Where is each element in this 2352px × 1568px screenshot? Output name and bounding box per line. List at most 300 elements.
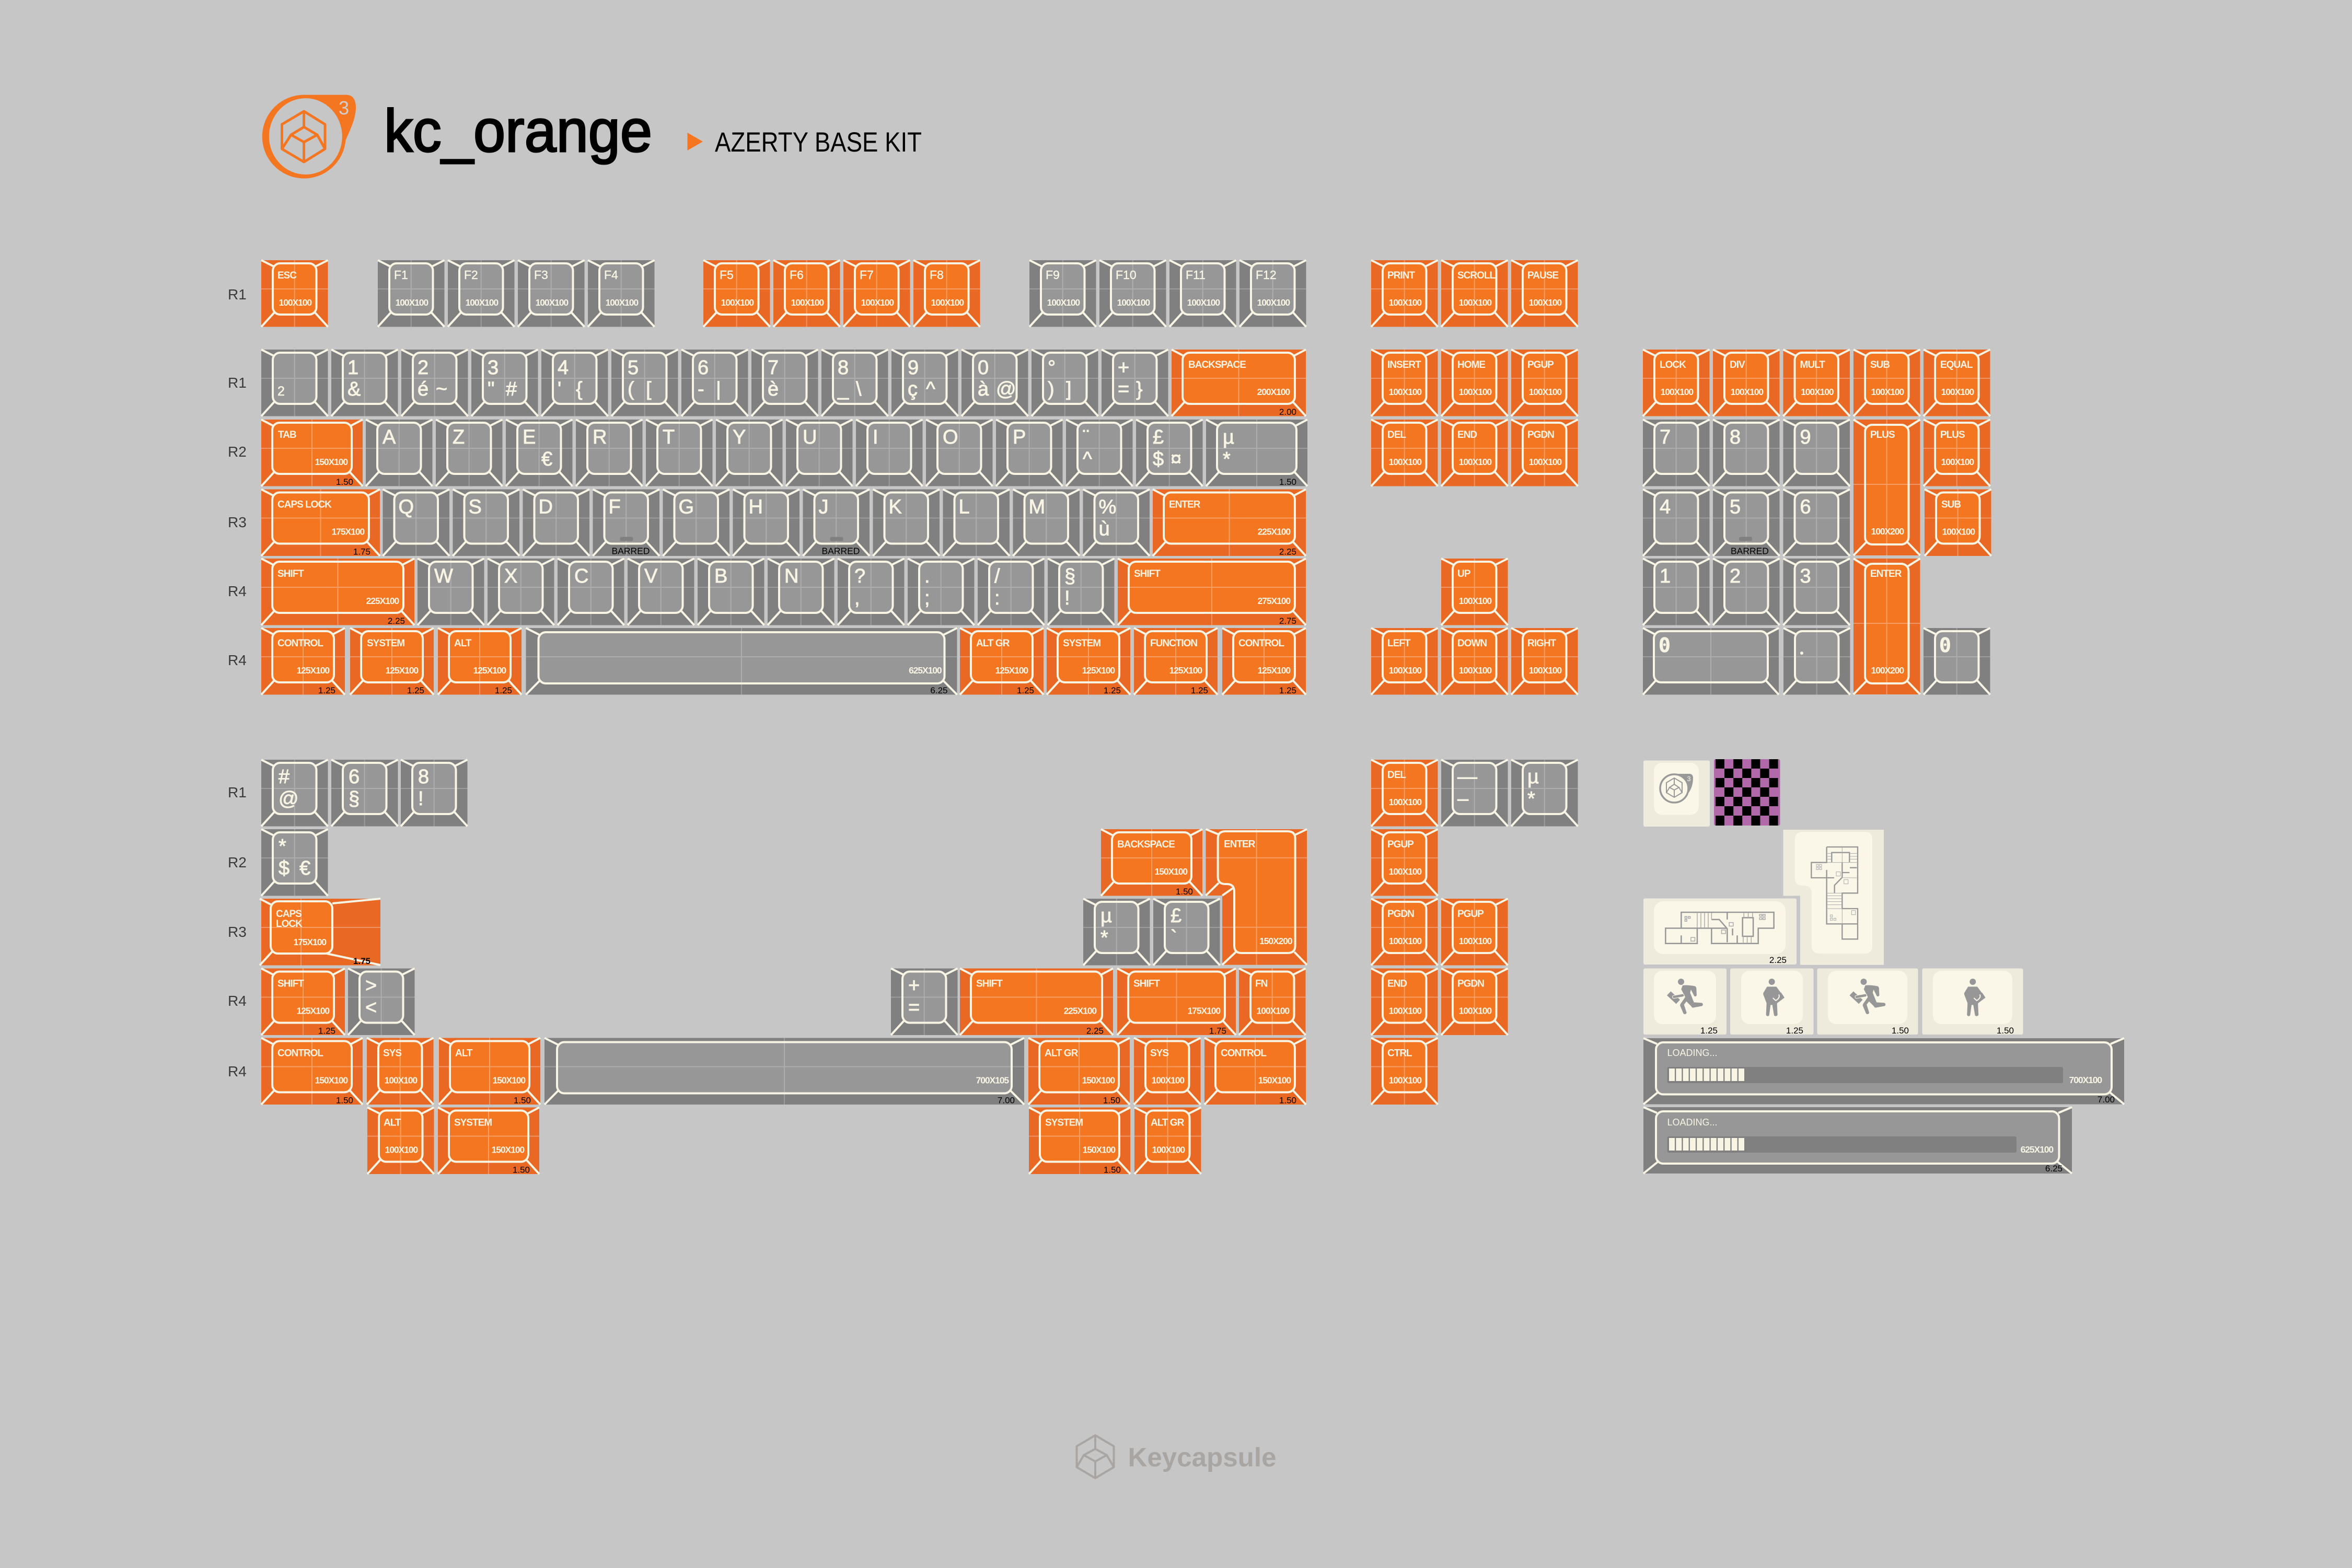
key: PGDN: PGDN bbox=[1527, 429, 1554, 440]
key: LEFT: 100X100 bbox=[1389, 665, 1422, 676]
key: N bbox=[768, 559, 834, 625]
key: 4: 4 bbox=[1660, 496, 1671, 518]
key: INSERT: 100X100 bbox=[1389, 387, 1422, 397]
key: LEFT bbox=[1371, 628, 1438, 695]
key: PGDN alt 2: PGDN bbox=[1457, 978, 1484, 990]
key: SYSTEM 1.50 bbox=[438, 1108, 539, 1175]
key: F11 bbox=[1169, 260, 1236, 327]
key: pound: ¤ bbox=[1171, 448, 1181, 470]
novelty key: running figure 1.50 bbox=[1817, 969, 1918, 1036]
key: R bbox=[576, 420, 643, 486]
key: L: L bbox=[958, 496, 970, 518]
key: M: M bbox=[1028, 496, 1045, 518]
key: space 6.25: 6.25 bbox=[930, 686, 948, 695]
key: right CONTROL: 125X100 bbox=[1258, 665, 1291, 676]
novelty key: vertical floor map bbox=[1783, 830, 1884, 965]
key: CONTROL 1.50 bbox=[261, 1038, 363, 1106]
novelty key: loading bar 7.00: LOADING... bbox=[1667, 1048, 1718, 1058]
key: stepped CAPS LOCK bbox=[260, 899, 380, 966]
row labels: top block: R3 bbox=[228, 514, 247, 530]
key: PLUS: 100X100 bbox=[1941, 457, 1974, 467]
key: decimal bbox=[1783, 628, 1850, 695]
key: superscript 2 bbox=[261, 350, 328, 416]
key: 6 section: § bbox=[349, 788, 360, 810]
key: I: I bbox=[873, 426, 878, 448]
key: right CONTROL: CONTROL bbox=[1238, 638, 1284, 649]
key: K: K bbox=[888, 496, 902, 518]
key: tall ENTER bbox=[1853, 559, 1920, 694]
key: pound bbox=[1136, 420, 1203, 486]
key: DOWN bbox=[1441, 628, 1508, 695]
key: plus equals bbox=[891, 969, 957, 1035]
key: PRINT bbox=[1371, 260, 1438, 327]
key: SUB small bbox=[1925, 489, 1991, 556]
novelty key: loading bar 6.25: 6.25 bbox=[2045, 1164, 2063, 1174]
key: F11: F11 bbox=[1186, 268, 1206, 282]
key: BACKSPACE 1.50 bbox=[1101, 829, 1202, 897]
key: F3: F3 bbox=[534, 268, 548, 282]
key: V bbox=[628, 559, 694, 625]
novelty key: running figure 1.50: 1.50 bbox=[1892, 1026, 1909, 1036]
key: N: N bbox=[784, 565, 798, 587]
key: 6: - bbox=[698, 378, 704, 400]
key: PAUSE: 100X100 bbox=[1529, 297, 1562, 308]
key: FUNCTION bbox=[1134, 628, 1218, 695]
key: DEL: 100X100 bbox=[1389, 457, 1422, 467]
key: Q: Q bbox=[398, 496, 414, 518]
key: left CONTROL: 1.25 bbox=[318, 686, 335, 695]
key: CAPS LOCK bbox=[261, 489, 380, 557]
key: F9: F9 bbox=[1046, 268, 1060, 282]
key: 3 bbox=[1783, 559, 1850, 625]
key: H bbox=[733, 489, 800, 556]
key: J barred: BARRED bbox=[821, 545, 860, 556]
key: F barred bbox=[593, 489, 659, 556]
floor map drawing: vertical bbox=[1811, 847, 1858, 939]
key: F12 bbox=[1239, 260, 1306, 327]
key: 8 bbox=[821, 350, 888, 416]
key: P: P bbox=[1013, 426, 1026, 448]
key: UP: UP bbox=[1457, 568, 1471, 579]
key: dashes bbox=[1441, 760, 1508, 827]
key: mu: µ bbox=[1223, 426, 1234, 448]
key: 4: 4 bbox=[558, 357, 569, 379]
key: 6: 6 bbox=[698, 357, 709, 379]
key: F1: F1 bbox=[394, 268, 408, 282]
key: 1 bbox=[331, 350, 398, 416]
row labels: top block: R1 bbox=[228, 375, 247, 391]
key: left SHIFT: 2.25 bbox=[388, 616, 405, 626]
key: 3: # bbox=[506, 378, 517, 400]
key: HOME: HOME bbox=[1457, 359, 1485, 370]
key: 2: 2 bbox=[418, 357, 428, 379]
key: 8: 8 bbox=[838, 357, 849, 379]
key: 5 barred: 5 bbox=[1730, 496, 1741, 518]
key: space 7.00 bbox=[544, 1038, 1024, 1106]
key: F4: F4 bbox=[604, 268, 618, 282]
key: dashes: – bbox=[1457, 788, 1469, 810]
key: stepped CAPS LOCK: 175X100 bbox=[294, 937, 327, 947]
key: ALT: 100X100 bbox=[385, 1144, 418, 1155]
key: ENTER bbox=[1153, 489, 1306, 557]
key: slash: : bbox=[994, 587, 1000, 609]
key: 4: ' bbox=[558, 378, 561, 400]
novelty key: logo bbox=[1643, 761, 1710, 827]
key: slash bbox=[978, 559, 1044, 625]
key: HOME bbox=[1441, 350, 1508, 416]
key: FUNCTION: 125X100 bbox=[1169, 665, 1202, 676]
key: SYS right bbox=[1134, 1038, 1201, 1105]
key: PGUP alt bbox=[1371, 829, 1438, 896]
key: LEFT: LEFT bbox=[1387, 638, 1411, 649]
key: left CONTROL bbox=[261, 628, 345, 695]
key: 5: 5 bbox=[628, 357, 639, 379]
key: ENTER: ENTER bbox=[1169, 500, 1201, 510]
logo: orange portal keycap mark bbox=[262, 95, 356, 178]
key: C: C bbox=[574, 565, 588, 587]
key: X: X bbox=[504, 565, 517, 587]
key: MULT: MULT bbox=[1800, 359, 1825, 370]
key: 5 barred: BARRED bbox=[1731, 545, 1769, 556]
key: tall ENTER: 100X200 bbox=[1871, 665, 1904, 676]
key: BACKSPACE 1.50: 1.50 bbox=[1176, 887, 1193, 897]
novelty key: standing figure 1.25 bbox=[1730, 969, 1813, 1036]
key: F barred: F bbox=[608, 496, 621, 518]
key: SCROLL: 100X100 bbox=[1459, 297, 1492, 308]
key: K bbox=[873, 489, 940, 556]
key: superscript 2: 2 bbox=[277, 384, 285, 399]
key: hash at: # bbox=[279, 766, 289, 788]
key: left ALT: 125X100 bbox=[473, 665, 506, 676]
key: ISO ENTER bbox=[1206, 829, 1307, 965]
key: right SYSTEM bbox=[1047, 628, 1130, 695]
key: F8 bbox=[913, 260, 980, 327]
key: ALT bbox=[367, 1108, 434, 1174]
key: H: H bbox=[748, 496, 763, 518]
key: F2: F2 bbox=[464, 268, 478, 282]
key: CTRL bbox=[1371, 1038, 1438, 1105]
key: END: END bbox=[1457, 429, 1477, 440]
heading: kc_orange: kc_orange bbox=[384, 98, 652, 165]
key: F1 bbox=[378, 260, 444, 327]
key: F9: 100X100 bbox=[1047, 297, 1080, 308]
key: plus: + bbox=[1118, 357, 1129, 379]
key: 9: ^ bbox=[926, 378, 935, 400]
key: SCROLL: SCROLL bbox=[1457, 270, 1496, 281]
key: PGDN alt bbox=[1371, 899, 1438, 966]
key: SYS: 100X100 bbox=[385, 1075, 418, 1086]
key: PRINT: PRINT bbox=[1387, 270, 1415, 281]
novelty key: standing figure 1.50 bbox=[1922, 969, 2023, 1036]
key: left ALT: ALT bbox=[454, 638, 472, 649]
key: wide 0: 0 bbox=[1659, 634, 1671, 657]
key: SYSTEM right 1.50: 1.50 bbox=[1104, 1165, 1121, 1175]
key: 6 section bbox=[331, 760, 398, 827]
key: right CONTROL bbox=[1222, 628, 1306, 695]
novelty key: purple and black checker bbox=[1714, 759, 1780, 826]
key: percent: % bbox=[1098, 496, 1116, 518]
key: 2: ~ bbox=[436, 378, 447, 400]
key: small 0 bbox=[1924, 628, 1990, 695]
key: 2 bbox=[401, 350, 468, 416]
key: ALT 1.50: 1.50 bbox=[514, 1095, 531, 1106]
key: mu star: µ bbox=[1527, 766, 1539, 788]
key: DEL bbox=[1371, 420, 1438, 486]
key: pound grave: £ bbox=[1171, 905, 1181, 927]
key: DIV: DIV bbox=[1730, 359, 1745, 370]
key: PLUS: PLUS bbox=[1940, 429, 1965, 440]
key: F10 bbox=[1099, 260, 1166, 327]
key: dead circumflex bbox=[1066, 420, 1133, 486]
key: stepped CAPS LOCK: 1.75 bbox=[353, 956, 370, 966]
key: BACKSPACE: 200X100 bbox=[1257, 387, 1290, 397]
key: B bbox=[698, 559, 764, 625]
key: question: , bbox=[854, 587, 860, 609]
novelty key: loading bar 6.25: 625X100 bbox=[2021, 1144, 2054, 1155]
key: space 6.25 bbox=[526, 628, 957, 695]
key: ENTER: 2.25 bbox=[1279, 547, 1296, 557]
key: mu: * bbox=[1223, 448, 1231, 470]
key: asterisk dollar euro: € bbox=[299, 857, 310, 879]
key: EQUAL bbox=[1924, 350, 1990, 416]
row labels: top block: R1 bbox=[228, 286, 247, 303]
panel: function row bbox=[261, 260, 1578, 327]
row labels: lower block bbox=[228, 784, 247, 1079]
key: UP: 100X100 bbox=[1459, 596, 1492, 606]
key: CONTROL right 1.50: CONTROL bbox=[1221, 1048, 1267, 1059]
key: tall PLUS: 100X200 bbox=[1871, 526, 1904, 537]
key: SYSTEM right 1.50: 150X100 bbox=[1083, 1144, 1116, 1155]
key: 3: " bbox=[488, 378, 494, 400]
key: PGDN alt 2 bbox=[1441, 969, 1508, 1035]
key: ESC bbox=[261, 260, 328, 327]
key: tall PLUS bbox=[1853, 420, 1920, 555]
row labels: lower block: R3 bbox=[228, 924, 247, 940]
key: ISO ENTER: 150X200 bbox=[1259, 936, 1293, 946]
key: F1: 100X100 bbox=[396, 297, 428, 308]
key: F6: 100X100 bbox=[791, 297, 824, 308]
key: 0 bbox=[961, 350, 1028, 416]
key: ALT GR 1.50 bbox=[1028, 1038, 1130, 1106]
key: CTRL: 100X100 bbox=[1389, 1075, 1422, 1086]
key: Z: Z bbox=[453, 426, 465, 448]
key: BACKSPACE: 2.00 bbox=[1279, 407, 1296, 417]
key: TAB: 150X100 bbox=[315, 457, 348, 467]
key: E bbox=[506, 420, 573, 486]
key: FN: 100X100 bbox=[1257, 1005, 1290, 1016]
key: SYS bbox=[367, 1038, 434, 1105]
key: DEL alt: DEL bbox=[1387, 770, 1406, 781]
key: asterisk dollar euro: $ bbox=[279, 857, 289, 879]
key: left CONTROL: 125X100 bbox=[297, 665, 330, 676]
footer logo: Keycapsule bbox=[1076, 1435, 1276, 1478]
key: pound grave bbox=[1153, 899, 1220, 966]
key: 4: { bbox=[576, 378, 583, 400]
key: M bbox=[1013, 489, 1080, 556]
key: CTRL: CTRL bbox=[1387, 1048, 1412, 1059]
key: U: U bbox=[803, 426, 817, 448]
key: FUNCTION: FUNCTION bbox=[1150, 638, 1197, 649]
key: right SHIFT: 2.75 bbox=[1279, 616, 1296, 626]
key: 3: 3 bbox=[488, 357, 499, 379]
key: ALT GR: 125X100 bbox=[995, 665, 1028, 676]
key: F4 bbox=[588, 260, 654, 327]
key: left CONTROL: CONTROL bbox=[277, 638, 323, 649]
key: J barred: J bbox=[818, 496, 829, 518]
key: F3: 100X100 bbox=[536, 297, 569, 308]
key: BACKSPACE bbox=[1172, 350, 1306, 417]
key: SHIFT 1.25 bbox=[261, 969, 345, 1036]
key: right CONTROL: 1.25 bbox=[1279, 686, 1296, 695]
key: INSERT bbox=[1371, 350, 1438, 416]
key: PGDN alt: PGDN bbox=[1387, 909, 1414, 920]
key: O: O bbox=[943, 426, 958, 448]
key: 1 bbox=[1643, 559, 1710, 625]
key: TAB bbox=[261, 420, 363, 487]
key: mu: 1.50 bbox=[1279, 477, 1296, 487]
key: 1: & bbox=[347, 378, 361, 400]
key: left SHIFT bbox=[261, 559, 414, 626]
key: SYS right: 100X100 bbox=[1152, 1075, 1185, 1086]
panel: alternate navigation keys bbox=[1371, 760, 1578, 1105]
key: FUNCTION: 1.25 bbox=[1191, 686, 1208, 695]
key: V: V bbox=[644, 565, 658, 587]
key: 8: _ bbox=[837, 378, 849, 400]
panel: novelty keys bbox=[1643, 759, 2124, 1174]
key: left SHIFT: SHIFT bbox=[277, 568, 304, 579]
key: TAB: TAB bbox=[278, 429, 296, 440]
novelty key: logo: 3 bbox=[1687, 775, 1691, 783]
key: PGUP bbox=[1511, 350, 1578, 416]
key: Y: Y bbox=[733, 426, 746, 448]
key: ALT 1.50: 150X100 bbox=[493, 1075, 526, 1086]
key: 2 bbox=[1713, 559, 1780, 625]
key: question: ? bbox=[854, 565, 865, 587]
key: question bbox=[838, 559, 904, 625]
key: CAPS LOCK: 175X100 bbox=[332, 527, 365, 537]
key: DIV: 100X100 bbox=[1731, 387, 1764, 397]
key: angle brackets: > bbox=[365, 975, 377, 997]
key: right SHIFT: SHIFT bbox=[1134, 568, 1161, 579]
key: right SHIFT bbox=[1118, 559, 1306, 626]
key: PGDN: 100X100 bbox=[1529, 457, 1562, 467]
row labels: lower block: R1 bbox=[228, 784, 247, 800]
icon: orange arrow bbox=[688, 133, 703, 150]
key: END bbox=[1441, 420, 1508, 486]
key: RIGHT: 100X100 bbox=[1529, 665, 1562, 676]
key: left ALT: 1.25 bbox=[495, 686, 512, 695]
panel: main alpha block bbox=[261, 350, 1307, 695]
key: CONTROL 1.50: CONTROL bbox=[277, 1048, 323, 1059]
key: ALT 1.50: ALT bbox=[455, 1048, 473, 1059]
key: 3: 3 bbox=[1800, 565, 1811, 587]
key: 7 bbox=[1643, 420, 1710, 486]
key: pound: £ bbox=[1153, 426, 1164, 448]
key: F7 bbox=[843, 260, 910, 327]
key: PGDN bbox=[1511, 420, 1578, 486]
key: RIGHT bbox=[1511, 628, 1578, 695]
key: 2: 2 bbox=[1730, 565, 1741, 587]
key: DOWN: DOWN bbox=[1457, 638, 1487, 649]
key: SUB: 100X100 bbox=[1871, 387, 1904, 397]
row labels: lower block: R4 bbox=[228, 993, 247, 1009]
key: right SYSTEM: SYSTEM bbox=[1063, 638, 1100, 649]
key: PAUSE bbox=[1511, 260, 1578, 327]
key: CAPS LOCK: CAPS LOCK bbox=[277, 500, 332, 510]
row labels: top block bbox=[228, 286, 247, 668]
key: 6 section: 6 bbox=[349, 766, 360, 788]
key: stepped CAPS LOCK: LOCK bbox=[276, 919, 303, 930]
key: PLUS bbox=[1924, 420, 1990, 486]
key: 7 bbox=[751, 350, 818, 416]
key: LOCK: 100X100 bbox=[1661, 387, 1694, 397]
key: F5 bbox=[703, 260, 770, 327]
key: ENTER: 225X100 bbox=[1258, 527, 1291, 537]
key: 5: [ bbox=[646, 378, 652, 400]
key: UP bbox=[1441, 559, 1508, 625]
key: DEL alt bbox=[1371, 760, 1438, 827]
key: 7: 7 bbox=[768, 357, 779, 379]
key: 8 exclamation bbox=[401, 760, 467, 827]
key: FN: FN bbox=[1255, 978, 1268, 990]
key: ALT GR: 1.25 bbox=[1017, 686, 1034, 695]
key: SHIFT 1.75: 1.75 bbox=[1209, 1026, 1226, 1036]
key: left SYSTEM: 125X100 bbox=[386, 665, 419, 676]
key: CONTROL right 1.50: 150X100 bbox=[1258, 1075, 1291, 1086]
key: PGUP alt: 100X100 bbox=[1389, 866, 1422, 877]
key: angle brackets: < bbox=[365, 997, 377, 1019]
row labels: lower block: R4 bbox=[228, 1063, 247, 1079]
key: SHIFT 2.25: 2.25 bbox=[1086, 1026, 1104, 1036]
key: F8: F8 bbox=[930, 268, 944, 282]
row labels: top block: R2 bbox=[228, 444, 247, 460]
key: wide 0 bbox=[1643, 628, 1779, 695]
key: BACKSPACE 1.50: 150X100 bbox=[1155, 866, 1188, 877]
key: E: € bbox=[541, 448, 552, 470]
key: 7: 7 bbox=[1660, 426, 1671, 448]
key: CONTROL right 1.50: 1.50 bbox=[1279, 1095, 1296, 1106]
key: PGUP: PGUP bbox=[1527, 359, 1554, 370]
key: slash: / bbox=[994, 565, 1000, 587]
key: 0: à bbox=[978, 378, 989, 400]
key: 8 bbox=[1713, 420, 1780, 486]
key: F11: 100X100 bbox=[1187, 297, 1220, 308]
key: plus bbox=[1102, 350, 1168, 416]
key: space 7.00: 700X105 bbox=[976, 1075, 1009, 1086]
key: SYS right: SYS bbox=[1150, 1048, 1168, 1059]
novelty key: loading bar 7.00: 700X100 bbox=[2069, 1075, 2102, 1085]
key: F5: 100X100 bbox=[721, 297, 754, 308]
key: hash at bbox=[261, 760, 328, 827]
key: PGDN alt 2: 100X100 bbox=[1459, 1005, 1492, 1016]
subheading: AZERTY BASE KIT bbox=[715, 127, 922, 158]
key: tall PLUS: PLUS bbox=[1870, 429, 1895, 440]
key: Y bbox=[716, 420, 783, 486]
key: U bbox=[786, 420, 853, 486]
key: plus: } bbox=[1136, 378, 1143, 400]
key: D bbox=[523, 489, 589, 556]
key: ALT GR small: ALT GR bbox=[1151, 1117, 1185, 1129]
key: F3 bbox=[518, 260, 584, 327]
key: pound grave: ` bbox=[1171, 927, 1177, 949]
key: section: § bbox=[1064, 565, 1075, 587]
key: degree: ] bbox=[1066, 378, 1072, 400]
key: space 6.25: 625X100 bbox=[909, 665, 942, 676]
key: ALT GR: ALT GR bbox=[976, 638, 1010, 649]
key: I bbox=[856, 420, 923, 486]
panel: navigation cluster bbox=[1371, 350, 1578, 695]
key: S: S bbox=[468, 496, 482, 518]
